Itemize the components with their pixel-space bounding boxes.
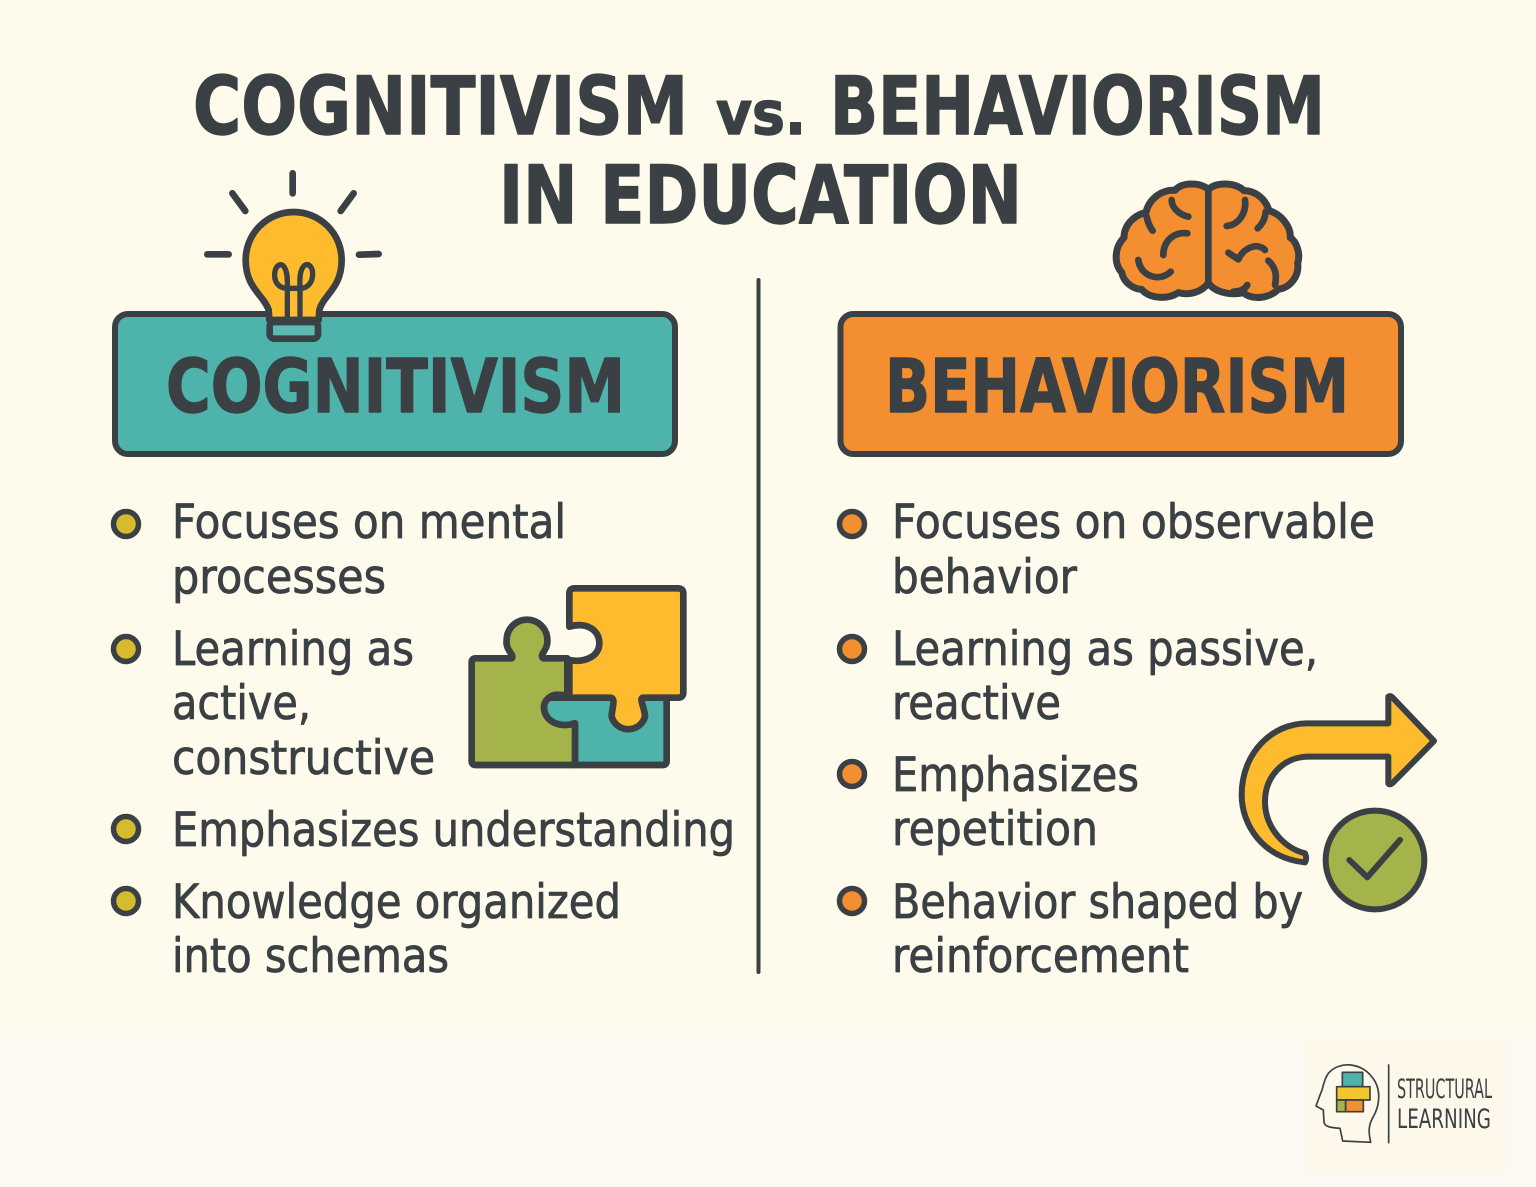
logo: structural learning (1307, 1040, 1506, 1171)
title: vs. (716, 79, 806, 149)
icon: light bulb (207, 173, 379, 339)
bullet: active learning: constructive (172, 731, 435, 786)
bullet: active learning (114, 622, 435, 786)
bullet: understanding: Emphasizes understanding (172, 803, 735, 858)
title: IN EDUCATION (499, 149, 1022, 242)
bullet: active learning: Learning as (172, 622, 414, 677)
bullet: schemas: into schemas (172, 929, 449, 984)
title (193, 60, 1325, 242)
title: COGNITIVISM (193, 60, 688, 153)
bullet: observable behavior (840, 495, 1375, 605)
bullet: passive learning: reactive (892, 676, 1061, 731)
bullet: repetition: repetition (892, 802, 1098, 857)
bullet: mental processes: Focuses on mental (172, 495, 566, 550)
panel: behaviorism header (840, 314, 1401, 454)
bullet: observable behavior: behavior (892, 550, 1078, 605)
logo: structural learning: LEARNING (1397, 1104, 1491, 1135)
bullet: repetition: Emphasizes (892, 748, 1139, 803)
bullet: observable behavior: Focuses on observable (892, 495, 1375, 550)
bullet: mental processes (114, 495, 566, 605)
bullet: schemas (114, 875, 621, 984)
icon: puzzle pieces (472, 588, 683, 765)
title: BEHAVIORISM (830, 60, 1325, 153)
list: cognitivism points (114, 495, 735, 984)
bullet: repetition (840, 748, 1139, 857)
bullet: passive learning (840, 622, 1318, 731)
bullet: mental processes: processes (172, 550, 386, 605)
bullet: passive learning: Learning as passive, (892, 622, 1318, 677)
panel: cognitivism header (115, 314, 675, 454)
list: behaviorism points (840, 495, 1375, 984)
bullet: reinforcement: reinforcement (892, 929, 1189, 984)
icon: curved arrow with check (1242, 696, 1434, 909)
bullet: schemas: Knowledge organized (172, 875, 621, 930)
icon: brain (1116, 184, 1299, 297)
center divider (756, 280, 760, 972)
bullet: reinforcement (840, 875, 1303, 984)
panel: behaviorism header: BEHAVIORISM (885, 344, 1349, 430)
bullet: active learning: active, (172, 676, 311, 731)
logo icon: head with blocks (1316, 1064, 1389, 1143)
panel: cognitivism header: COGNITIVISM (166, 344, 625, 430)
bullet: reinforcement: Behavior shaped by (892, 875, 1303, 930)
